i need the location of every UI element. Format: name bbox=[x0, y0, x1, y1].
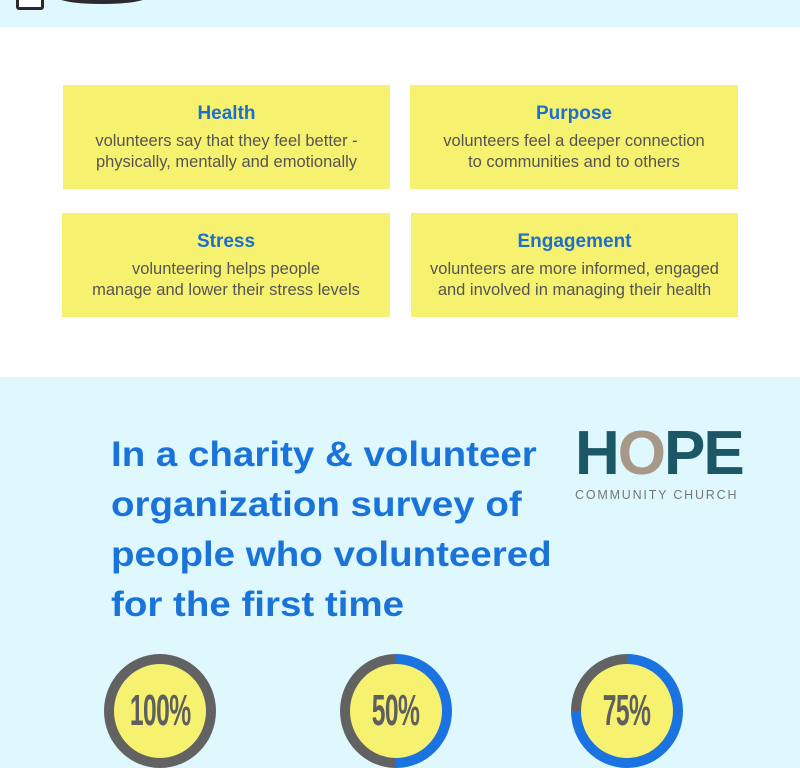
chart: 50%: 50% bbox=[372, 686, 420, 735]
panel: engagement: and involved in managing their health bbox=[438, 281, 711, 299]
panel: stress: manage and lower their stress levels bbox=[92, 281, 360, 299]
panel: health: Health bbox=[197, 103, 256, 124]
panel: health bbox=[63, 85, 390, 189]
top strip bbox=[0, 0, 800, 27]
heading: people who volunteered bbox=[111, 535, 552, 574]
chart: 100% bbox=[104, 654, 216, 768]
panel: engagement bbox=[411, 213, 738, 317]
icon: dark shape bbox=[57, 0, 147, 4]
chart: 75%: 75% bbox=[603, 686, 651, 735]
panel: purpose bbox=[410, 85, 738, 189]
panel: engagement: volunteers are more informed, engaged bbox=[430, 260, 719, 278]
panel: survey section bbox=[0, 377, 800, 768]
panel: stress: volunteering helps people bbox=[132, 260, 320, 278]
panel: purpose: Purpose bbox=[536, 103, 612, 124]
panel: health: physically, mentally and emotionally bbox=[96, 153, 357, 171]
logo: hope community church: COMMUNITY CHURCH bbox=[575, 488, 738, 502]
heading: for the first time bbox=[111, 585, 404, 624]
panel: purpose: to communities and to others bbox=[468, 153, 680, 171]
chart: 75% bbox=[571, 654, 683, 768]
chart: 50% bbox=[340, 654, 452, 768]
icon: box fragment bbox=[16, 0, 44, 10]
logo: hope community church: HOPE bbox=[575, 419, 743, 488]
panel: engagement: Engagement bbox=[517, 231, 632, 252]
panel: purpose: volunteers feel a deeper connection bbox=[443, 132, 705, 150]
heading: organization survey of bbox=[111, 485, 522, 524]
heading: In a charity & volunteer bbox=[111, 435, 537, 474]
panel: stress bbox=[62, 213, 390, 317]
chart: 100%: 100% bbox=[130, 686, 190, 735]
panel: health: volunteers say that they feel better - bbox=[95, 132, 358, 150]
heading bbox=[111, 435, 552, 624]
panel: stress: Stress bbox=[197, 231, 255, 252]
